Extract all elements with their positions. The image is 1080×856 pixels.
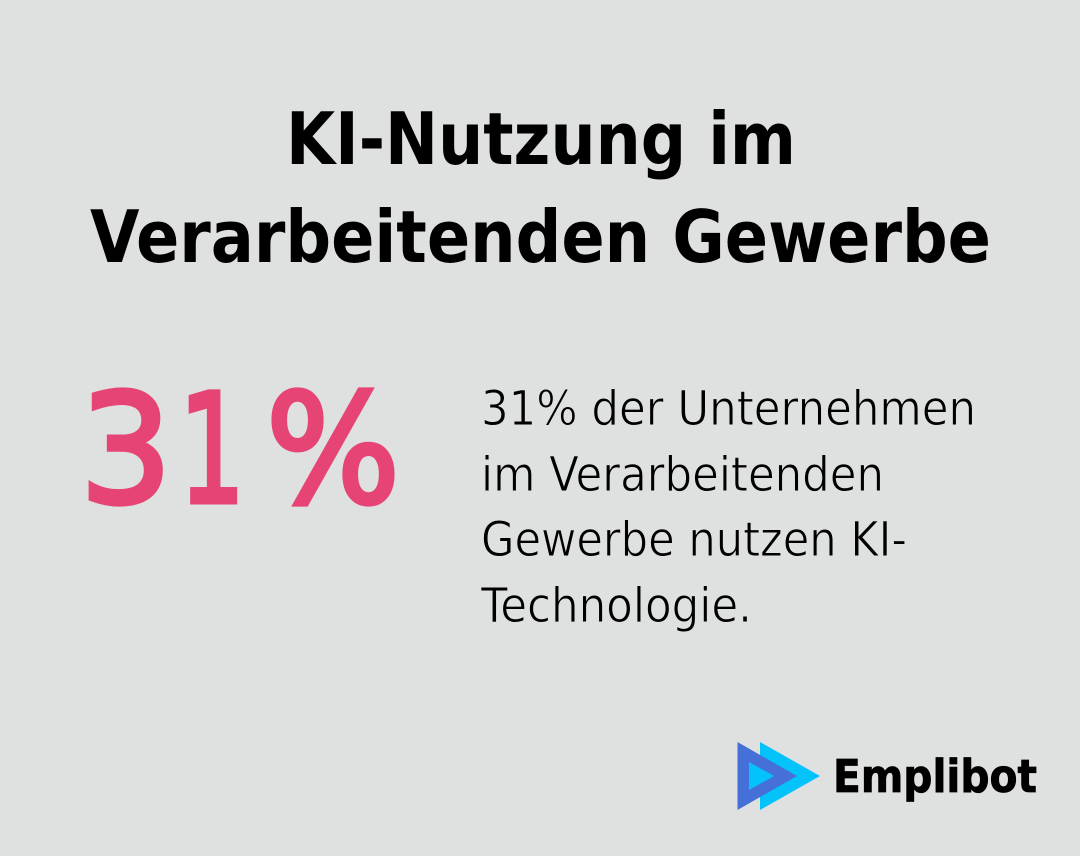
title: KI-Nutzung im: [286, 97, 796, 181]
description text: [480, 381, 976, 634]
icon: play triangles: [738, 742, 820, 810]
logo: Emplibot: [738, 742, 1037, 810]
big statistic: 31%: 1: [179, 362, 245, 538]
title: [90, 97, 991, 279]
big statistic: 31%: 3: [80, 362, 172, 538]
description text: im Verarbeitenden: [481, 447, 884, 503]
big statistic: 31%: %: [266, 362, 400, 538]
description text: 31% der Unternehmen: [481, 381, 976, 437]
big statistic: 31%: [80, 362, 400, 538]
logo wordmark: Emplibot: [833, 750, 1037, 803]
description text: Technologie.: [480, 578, 752, 634]
title: Verarbeitenden Gewerbe: [90, 195, 991, 279]
description text: Gewerbe nutzen KI-: [481, 512, 907, 568]
